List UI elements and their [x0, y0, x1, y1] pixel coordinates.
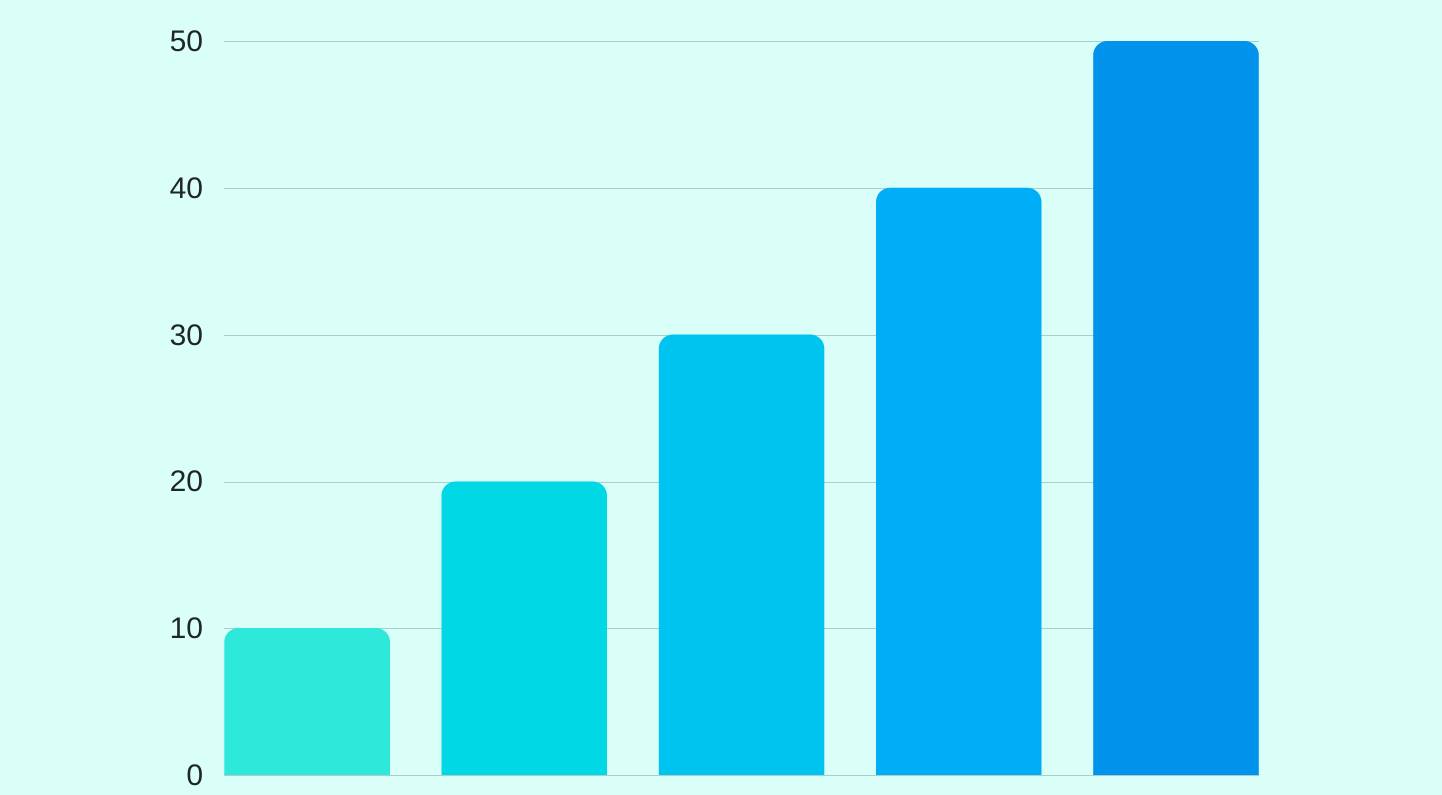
bar: value 20 [442, 482, 607, 775]
y axis labels [170, 25, 203, 792]
y axis labels: 50 [170, 25, 203, 58]
bar: value 40 [876, 188, 1042, 775]
y axis labels: 10 [170, 612, 203, 645]
y axis labels: 40 [170, 172, 203, 205]
y axis labels: 0 [186, 759, 203, 792]
y axis labels: 20 [170, 465, 203, 498]
bar: value 10 [224, 628, 390, 775]
bar: value 30 [659, 334, 824, 775]
bar: value 50 [1093, 41, 1259, 775]
y axis labels: 30 [170, 319, 203, 352]
